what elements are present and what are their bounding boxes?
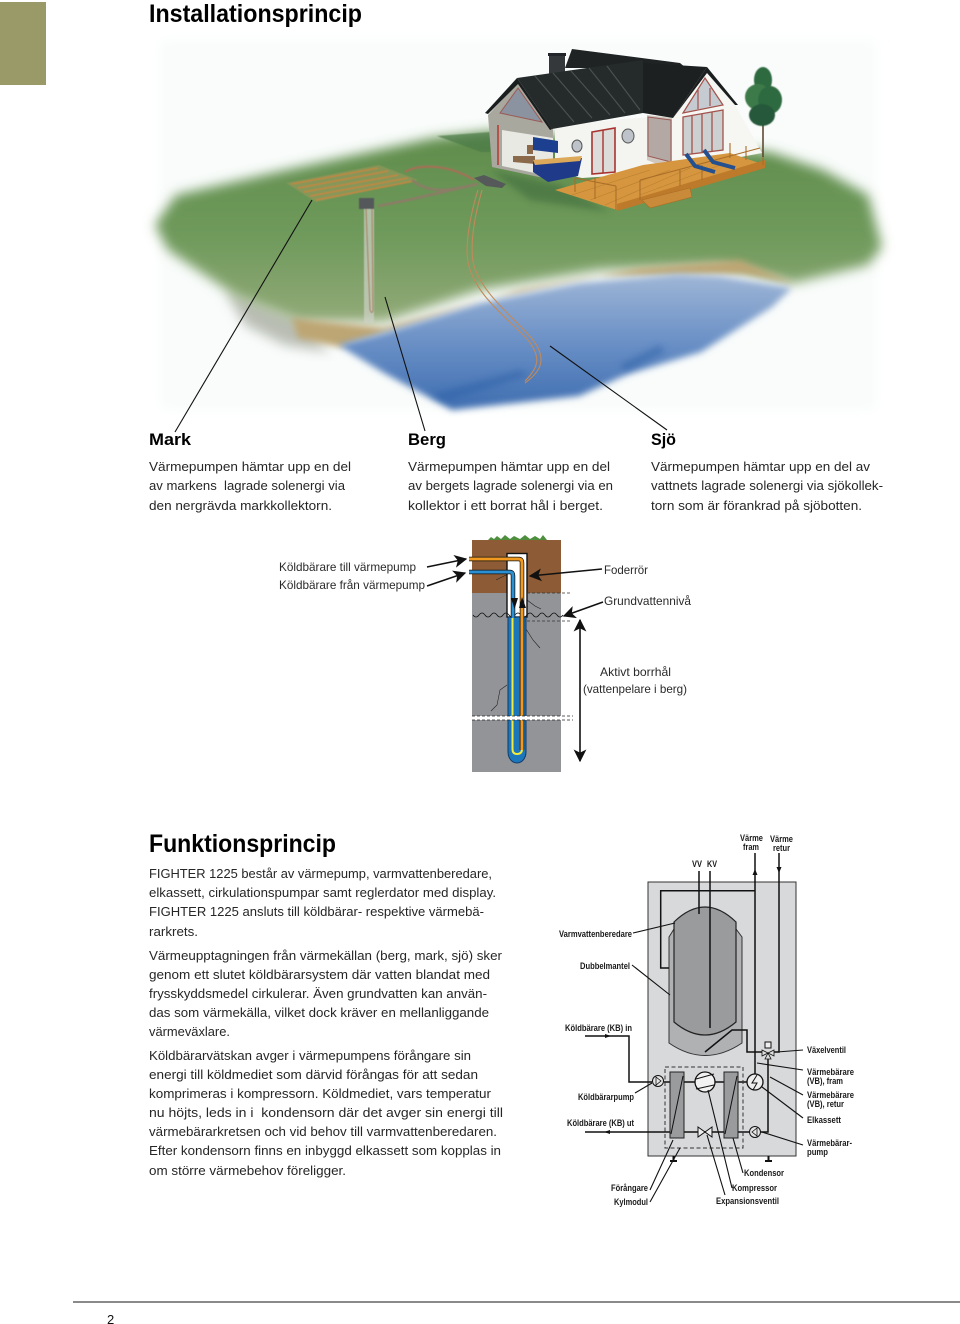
arrow: to pipe out — [427, 573, 465, 586]
leader lines — [632, 923, 803, 1202]
body text: värmebärarkretsen och vid behov till varmvattenberedaren. — [149, 1124, 497, 1139]
cross roof — [643, 63, 707, 118]
body text: frysskyddsmedel cirkulerar. Även grundvatten kan använ- — [149, 986, 487, 1001]
body text: Värmeupptagningen från värmekällan (berg, mark, sjö) sker — [149, 948, 503, 963]
right white wall — [672, 73, 762, 170]
body text — [149, 866, 503, 1178]
chimney cap — [548, 53, 566, 56]
schematic labels: Köldbärarpump — [578, 1092, 634, 1103]
rock borehole — [359, 198, 374, 323]
leader line: Berg — [385, 297, 425, 431]
VV and KV pipes — [699, 871, 710, 1028]
soil layer — [472, 540, 561, 593]
supply and return pipes — [755, 853, 779, 1074]
schematic labels: VV — [692, 859, 703, 870]
text block: Berg: Värmepumpen hämtar upp en del — [408, 459, 610, 474]
text block: Mark — [149, 430, 351, 513]
heading: Funktionsprincip: Funktionsprincip — [149, 830, 336, 858]
misty shore shadow — [225, 290, 330, 352]
ground: grass — [155, 131, 882, 322]
schematic labels: (VB), fram — [807, 1076, 843, 1087]
lake collector hose — [467, 190, 541, 383]
door mullion — [602, 130, 604, 173]
schematic labels: Elkassett — [807, 1115, 842, 1126]
borehole diagram — [469, 535, 573, 772]
schematic labels: Växelventil — [807, 1045, 846, 1056]
schematic labels: Värmebärar- — [807, 1138, 852, 1149]
body text: elkassett, cirkulationspumpar samt reglerdator med display. — [149, 885, 496, 900]
body text: Köldbärarvätskan avger i värmepumpens förångare sin — [149, 1048, 471, 1063]
body text: värmeväxlare. — [149, 1024, 230, 1039]
schematic labels: KV — [707, 859, 717, 870]
left gable wall — [488, 83, 553, 180]
railing — [575, 143, 763, 210]
borehole labels: Aktivt borrhål — [600, 665, 671, 679]
interior furniture — [513, 145, 535, 164]
water column — [508, 617, 526, 763]
roof seams — [535, 66, 640, 122]
chimney — [549, 55, 565, 75]
manifold — [474, 175, 506, 188]
collector hose: blue pipe — [469, 572, 513, 618]
body text: FIGHTER 1225 består av värmepump, varmvattenberedare, — [149, 866, 492, 881]
body text: nu höjts, leds in i kondensorn där det avger sin energi till — [149, 1105, 503, 1120]
illustration: house on island with ground, rock and lake collectors — [155, 40, 882, 410]
leader line: Mark — [175, 200, 312, 432]
body text: om större värmebehov föreligger. — [149, 1163, 346, 1178]
body text: komprimeras i kompressorn. Köldmediet, vars temperatur — [149, 1086, 492, 1101]
compressor — [695, 1072, 715, 1092]
round wall lamps — [622, 129, 634, 143]
brine pump — [652, 1076, 664, 1086]
schematic labels: Dubbelmantel — [580, 961, 630, 972]
evaporator — [670, 1072, 684, 1138]
electric heater — [747, 1074, 763, 1090]
house — [485, 49, 782, 211]
schematic labels: fram — [743, 842, 759, 853]
tree trunk — [762, 73, 764, 157]
sun loungers — [686, 150, 735, 172]
flow arrows — [511, 597, 526, 609]
left eave — [485, 78, 552, 130]
schematic labels: Expansionsventil — [716, 1196, 779, 1207]
heating loop pipe — [661, 891, 755, 968]
steel casing — [507, 554, 527, 617]
cut band — [472, 716, 573, 720]
ground collector coils — [286, 165, 478, 206]
mantle tank — [669, 929, 742, 1056]
big windows — [683, 110, 723, 155]
text block: Sjö — [651, 430, 883, 513]
cutaway interior — [502, 130, 553, 177]
borehole labels: Grundvattennivå — [604, 594, 691, 608]
deck planks — [572, 165, 720, 205]
schematic labels: Kylmodul — [614, 1197, 648, 1208]
body text: energi till köldmediet som därvid förångas för att sedan — [149, 1067, 478, 1082]
title: Installationsprincip — [149, 0, 362, 28]
text block: Mark: Mark — [149, 430, 192, 449]
wall backing — [555, 115, 673, 178]
cooling module dashed outline — [665, 1067, 743, 1148]
heating medium pump — [750, 1126, 760, 1138]
lake ripple shade — [430, 345, 665, 402]
leader line: Sjö — [550, 346, 667, 430]
cold side in — [585, 1036, 670, 1082]
right eave — [673, 67, 738, 118]
schematic labels: Värmebärare — [807, 1067, 854, 1078]
schematic labels: Kompressor — [732, 1183, 777, 1194]
text block: Sjö: torn som är förankrad på sjöbotten. — [651, 498, 862, 513]
borehole labels: Köldbärare från värmepump — [279, 578, 425, 592]
text block: Berg — [408, 430, 613, 513]
tree foliage — [745, 67, 782, 126]
ground: sand band — [292, 260, 796, 347]
reversing valve — [762, 1042, 774, 1059]
red door — [592, 128, 615, 174]
rock cracks — [491, 574, 541, 711]
cut band dashes — [472, 716, 573, 720]
inner water heater tank — [674, 907, 736, 1035]
cabinet feet — [670, 1156, 772, 1162]
dashed levels — [527, 593, 571, 621]
body text: Efter kondensorn finns en inbyggd elkassett som kopplas in — [149, 1143, 501, 1158]
schematic labels: Värmebärare — [807, 1090, 854, 1101]
borehole labels: Foderrör — [604, 563, 648, 577]
schematic labels: (VB), retur — [807, 1099, 844, 1110]
condenser — [724, 1072, 738, 1138]
schematic labels: Köldbärare (KB) ut — [567, 1118, 635, 1129]
text block: Sjö: Värmepumpen hämtar upp en del av — [651, 459, 870, 474]
text block: Mark: av markens lagrade solenergi via — [149, 478, 346, 493]
body text: rarkrets. — [149, 924, 198, 939]
lake — [338, 274, 792, 410]
shaded lawn patch — [437, 132, 491, 152]
decorative corner block — [0, 2, 46, 85]
flow direction ticks — [604, 867, 782, 1134]
cold side out — [585, 1131, 670, 1133]
right recessed wall — [647, 115, 672, 170]
water level waves — [473, 613, 563, 617]
schematic labels: Värme — [770, 834, 793, 845]
expansion valve — [698, 1127, 712, 1137]
body text: genom ett slutet köldbärarsystem där vatten blandat med — [149, 967, 490, 982]
wooden deck — [555, 153, 765, 210]
rock layer — [472, 593, 561, 772]
system schematic — [559, 833, 854, 1208]
text block: Berg: av bergets lagrade solenergi via en — [408, 478, 613, 493]
schematic labels — [559, 833, 854, 1208]
schematic labels: Värme — [740, 833, 763, 844]
house ground shadow — [490, 170, 610, 212]
gable window — [500, 88, 542, 122]
collector hose: yellow U loop — [512, 613, 522, 754]
borehole labels — [279, 560, 691, 696]
upper gable window — [683, 78, 723, 113]
borehole labels: (vattenpelare i berg) — [583, 682, 687, 696]
schematic labels: Köldbärare (KB) in — [565, 1023, 632, 1034]
deck edge — [617, 160, 765, 211]
collector hose: orange pipe — [469, 559, 522, 750]
schematic labels: Varmvattenberedare — [559, 929, 632, 940]
footer rule — [73, 1301, 960, 1303]
cabinet — [648, 882, 796, 1156]
body text: das som värmekälla, vilket dock kräver en mellanliggande — [149, 1005, 489, 1020]
grass strip — [488, 535, 547, 540]
schematic labels: pump — [807, 1147, 828, 1158]
borehole labels: Köldbärare till värmepump — [279, 560, 416, 574]
mantle connection — [705, 1030, 763, 1052]
blue heat pump panels — [533, 137, 558, 153]
text block: Sjö: vattnets lagrade solenergi via sjökollek- — [651, 478, 883, 493]
deck steps — [642, 188, 692, 208]
refrigerant lines — [684, 1057, 768, 1132]
recessed window — [648, 117, 671, 162]
text block: Berg: Berg — [408, 430, 446, 449]
schematic labels: retur — [773, 843, 790, 854]
red frame edge — [497, 125, 499, 165]
main roof — [517, 60, 643, 129]
schematic labels: Kondensor — [744, 1168, 784, 1179]
text block: Berg: kollektor i ett borrat hål i berget. — [408, 498, 603, 513]
schematic labels: Förångare — [611, 1183, 648, 1194]
arrow: groundwater level — [564, 602, 603, 616]
body text: FIGHTER 1225 ansluts till köldbärar- respektive värmebä- — [149, 904, 484, 919]
text block: Sjö: Sjö — [651, 430, 676, 449]
text block: Mark: den nergrävda markkollektorn. — [149, 498, 332, 513]
text block: Mark: Värmepumpen hämtar upp en del — [149, 459, 351, 474]
arrow: to pipe in — [427, 559, 466, 567]
arrow: active borehole height — [579, 620, 581, 761]
rear roof — [565, 49, 686, 68]
arrow: casing — [530, 569, 602, 576]
